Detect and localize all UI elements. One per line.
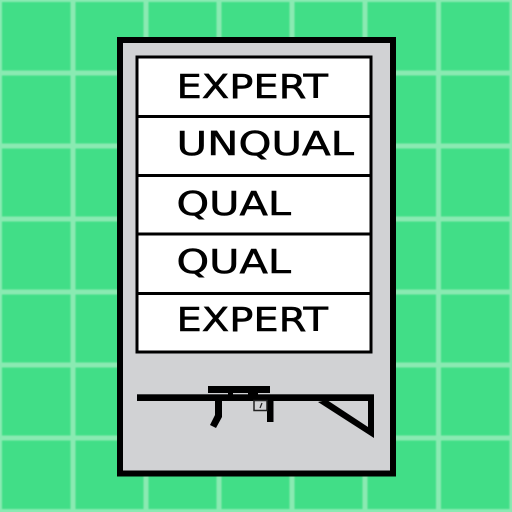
panel: card — [120, 40, 393, 474]
row 5 label: EXPERT — [176, 300, 329, 339]
row 4 label: QUAL — [176, 242, 292, 281]
table of ratings — [137, 57, 371, 352]
row 2 label: UNQUAL — [176, 124, 355, 163]
row 3 label: QUAL — [176, 184, 292, 223]
row 1 label: EXPERT — [176, 67, 329, 106]
icon: rifle — [137, 386, 374, 438]
